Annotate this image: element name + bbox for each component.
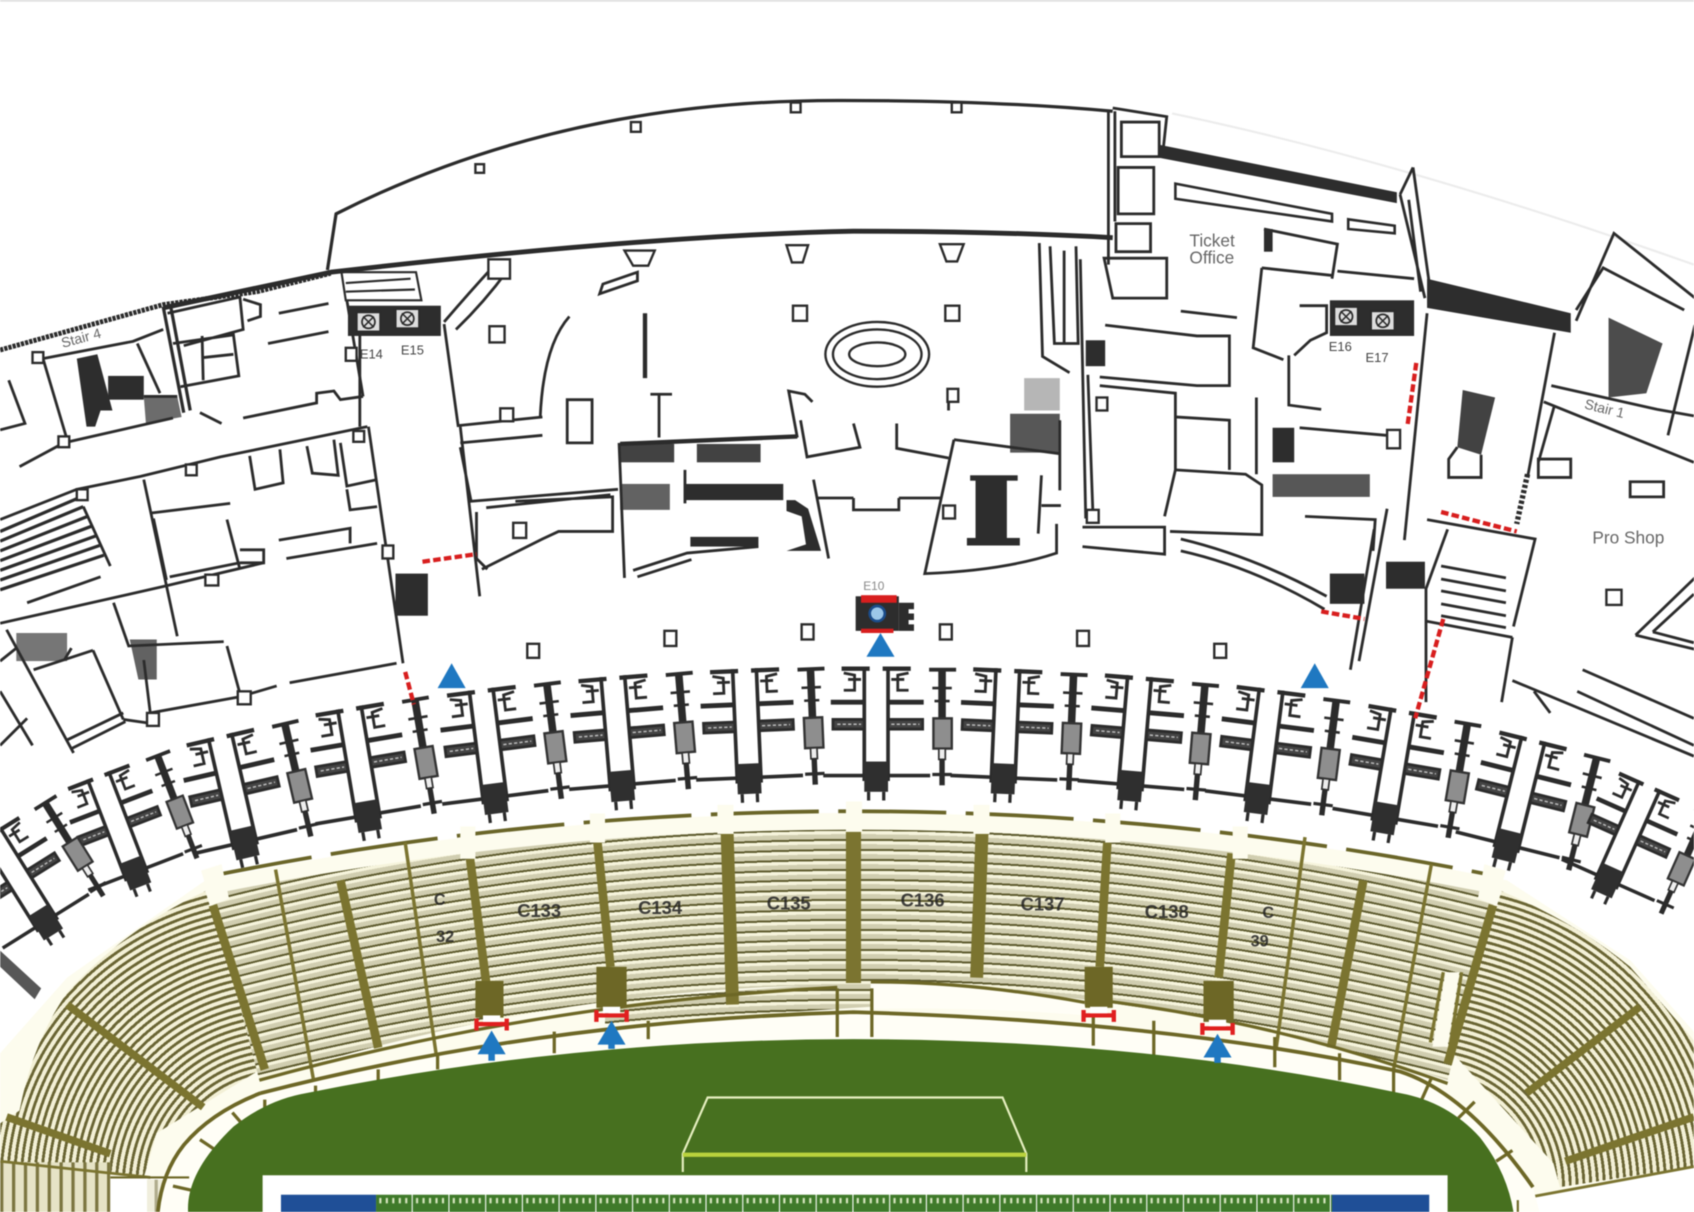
- right pillar: [1400, 167, 1429, 298]
- main front wall: [163, 231, 1113, 308]
- room labels: E10: [863, 579, 885, 593]
- section labels: C138: [1145, 901, 1189, 922]
- room labels: E15: [401, 342, 424, 357]
- seating bowl: [0, 802, 1694, 1212]
- auditorium rows: [0, 497, 104, 590]
- lower left vertical seating: [0, 1162, 110, 1212]
- elevators E14 E15: [348, 306, 441, 336]
- section labels: [434, 889, 1274, 950]
- right corner seating: [1450, 891, 1694, 1187]
- elevator E10: [856, 595, 914, 633]
- section labels: C136: [901, 889, 945, 910]
- faint outer arc: [1172, 113, 1694, 265]
- entry blocks: [475, 967, 1234, 1022]
- olive ticks: [173, 988, 1512, 1190]
- left wing rooms: [0, 329, 177, 467]
- room labels: Stair 4: [59, 325, 103, 351]
- room labels: E17: [1366, 350, 1389, 365]
- ticket office side: [1104, 108, 1167, 298]
- white strip between seats and field: [158, 1013, 1539, 1212]
- track markings: [376, 1195, 1332, 1212]
- blue accessible entry markers: [438, 633, 1329, 1063]
- section labels: 32: [436, 928, 454, 946]
- concourse base: [0, 813, 1694, 1212]
- left corner seating: [0, 891, 260, 1177]
- playing field: [188, 1039, 1513, 1212]
- room labels: [59, 230, 1664, 593]
- room labels: Ticket: [1189, 230, 1235, 250]
- dark hatched service blocks: [0, 145, 1663, 999]
- section labels: C137: [1021, 894, 1064, 915]
- column squares: [33, 103, 1622, 726]
- penalty box lines: [683, 1097, 1026, 1172]
- building walls: [0, 100, 1694, 756]
- room labels: E16: [1329, 339, 1352, 354]
- section labels: C135: [767, 893, 811, 914]
- section labels: C133: [517, 900, 561, 921]
- pro shop side: [1512, 233, 1694, 756]
- section labels: C134: [638, 897, 683, 918]
- main seating rows: [211, 830, 1496, 1080]
- room labels: Office: [1189, 248, 1234, 268]
- elevators E16 E17: [1330, 300, 1414, 336]
- white vomitory notches: [201, 802, 1506, 1047]
- top rail of seating: [205, 811, 1502, 877]
- white sideline box: [263, 1175, 1448, 1212]
- room labels: E14: [360, 347, 383, 362]
- red entry gates: [476, 1007, 1233, 1035]
- suite row: [0, 665, 1694, 968]
- fountain ellipse: [825, 322, 929, 387]
- lower left thin seating: [147, 1180, 186, 1212]
- restricted red barriers: [405, 363, 1517, 718]
- section labels: C: [434, 891, 446, 909]
- aisles: [0, 832, 1694, 1200]
- room labels: Pro Shop: [1592, 527, 1664, 547]
- blue end zone left: [281, 1195, 376, 1212]
- row extension left of centre: [605, 981, 871, 1024]
- room labels: Stair 1: [1583, 396, 1626, 421]
- section labels: 39: [1251, 932, 1269, 950]
- concourse centre rooms: [360, 265, 637, 427]
- roof canopy: [327, 100, 1113, 270]
- section labels: C: [1262, 904, 1274, 922]
- blue end zone right: [1332, 1195, 1429, 1212]
